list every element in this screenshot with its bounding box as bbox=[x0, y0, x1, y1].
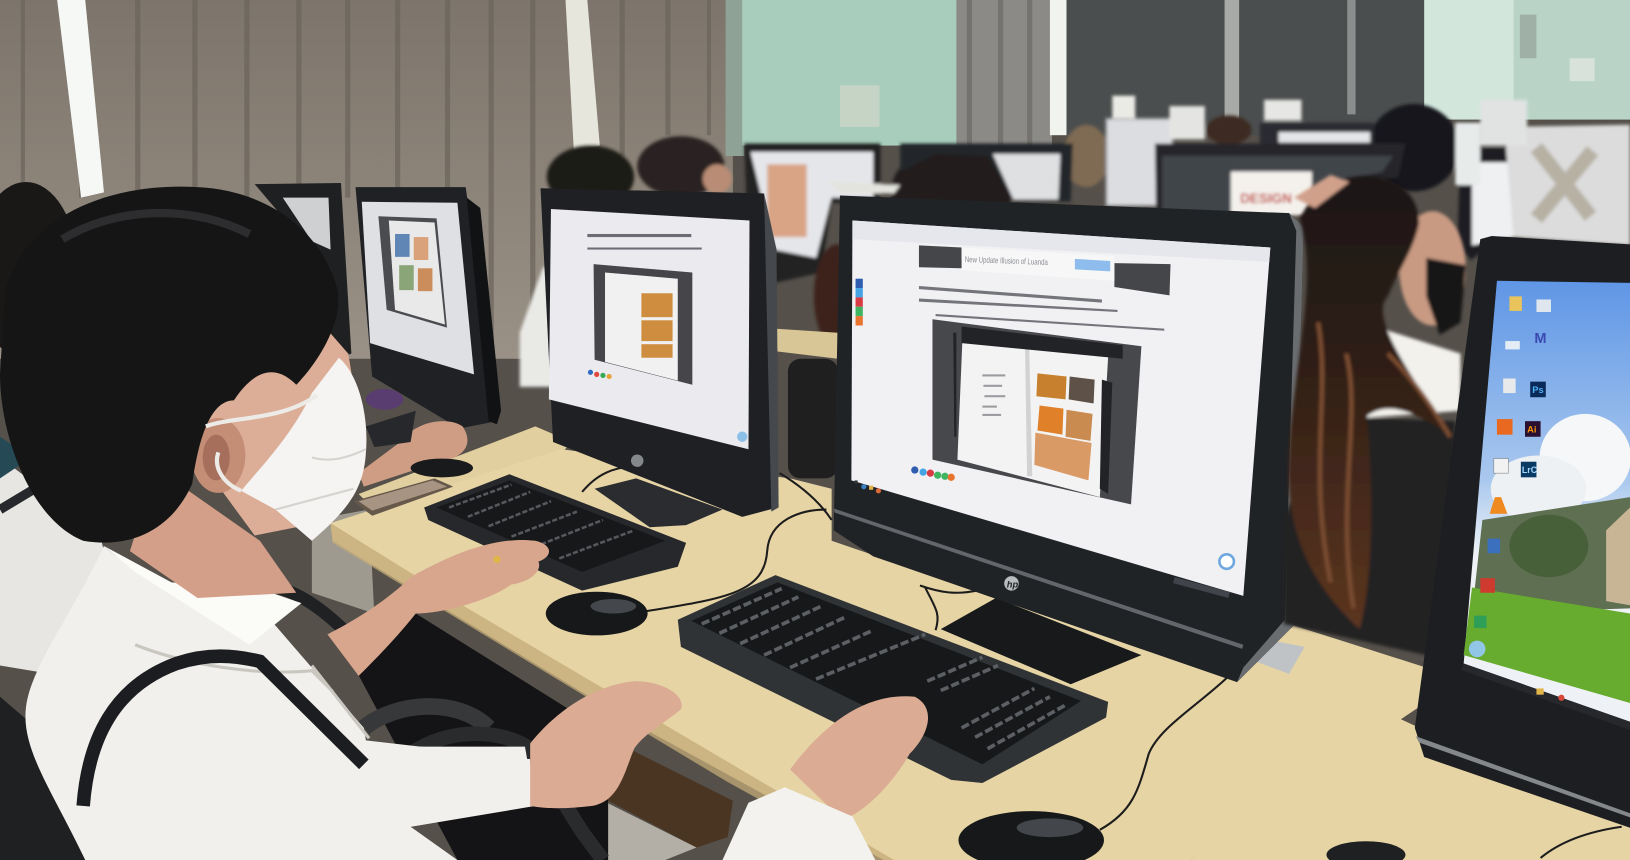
keyboard 2 bbox=[424, 474, 686, 591]
share icons bbox=[856, 279, 863, 325]
back monitor 4 bbox=[1155, 144, 1405, 213]
right student with long hair bbox=[1284, 175, 1466, 660]
main monitor bbox=[834, 196, 1305, 684]
back student hair bbox=[547, 146, 634, 208]
monitor 3 bbox=[356, 187, 501, 428]
left person in background bbox=[0, 182, 109, 676]
main monitor: New Update Illusion of Luanda bbox=[965, 254, 1048, 267]
back desks bbox=[312, 329, 838, 614]
mouse 2 bbox=[546, 592, 648, 635]
main desk surface bbox=[331, 449, 1630, 860]
monitor stand bbox=[941, 598, 1141, 684]
social circles bbox=[911, 466, 955, 481]
main student bbox=[0, 187, 928, 860]
main mouse bbox=[958, 811, 1104, 860]
document viewer bbox=[932, 319, 1141, 504]
near hand bbox=[530, 681, 682, 808]
page text lines bbox=[919, 286, 1164, 331]
back monitor 5 bbox=[1457, 148, 1507, 260]
chair bbox=[0, 697, 88, 860]
HP logo: hp bbox=[1007, 580, 1019, 590]
chat bubble bbox=[1219, 554, 1234, 569]
back monitor 1 bbox=[744, 144, 880, 283]
main keyboard bbox=[678, 575, 1108, 783]
far arm bbox=[327, 540, 549, 676]
desktop icons: M bbox=[1534, 331, 1546, 347]
far-left monitor bbox=[255, 183, 351, 359]
far hand on keyboard bbox=[790, 696, 928, 819]
neck and face bbox=[130, 468, 296, 598]
back monitor 3 bbox=[1106, 119, 1173, 206]
paper sign with X bbox=[1504, 125, 1630, 245]
near sleeve cuff bbox=[366, 747, 535, 827]
face mask bbox=[241, 358, 366, 541]
desktop icons: Ps bbox=[1532, 385, 1544, 395]
monitor 2 bbox=[541, 188, 779, 527]
left back student hand and phone bbox=[353, 389, 473, 516]
back monitor 2 bbox=[900, 144, 1073, 202]
taskbar bbox=[1536, 688, 1565, 701]
desktop icons: LrC bbox=[1522, 465, 1538, 475]
taskbar icons bbox=[855, 480, 881, 493]
web banner bbox=[919, 245, 962, 268]
back row: students and monitors: DESIGN bbox=[1240, 191, 1292, 206]
back row: students and monitors bbox=[520, 96, 1630, 387]
desktop icons bbox=[1469, 296, 1551, 657]
HP logo bbox=[1004, 576, 1019, 591]
cables bbox=[582, 466, 1622, 858]
small mouse bottom right bbox=[1326, 841, 1405, 860]
desktop icons: Ai bbox=[1527, 425, 1536, 435]
right monitor with desktop bbox=[1415, 236, 1630, 828]
hair bbox=[0, 187, 338, 543]
shirt bbox=[25, 546, 532, 860]
